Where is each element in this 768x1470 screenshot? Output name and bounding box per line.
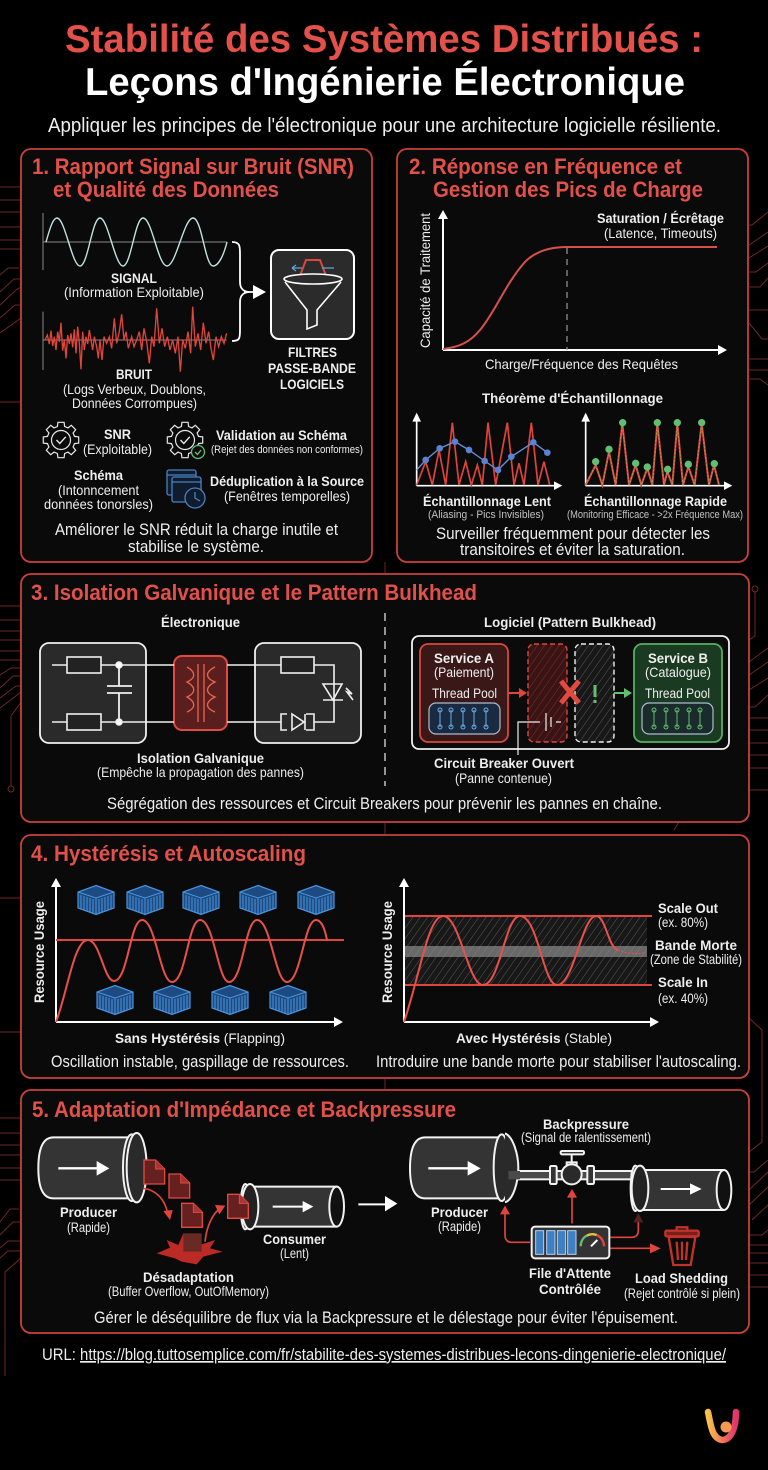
band labels: (ex. 80%): [658, 914, 708, 930]
icon: gear SNR: [43, 422, 79, 458]
sampling heading: Théorème d'Échantillonnage: [482, 390, 663, 406]
icon: gear validation: [167, 422, 204, 458]
mismatch labels: Désadaptation: [143, 1269, 234, 1285]
mismatch labels: (Rapide): [67, 1219, 110, 1235]
panel 2 footer: Surveiller fréquemment pour détecter les: [436, 525, 710, 543]
validation text: Validation au Schéma: [216, 427, 347, 443]
y axis label left: Resource Usage: [31, 901, 47, 1003]
panel: 5 impedance: [21, 1090, 749, 1333]
signal label: SIGNAL: [111, 270, 157, 286]
breaker label: Circuit Breaker Ouvert: [434, 755, 574, 771]
backpressure labels: Producer: [431, 1204, 489, 1220]
icon: bandpass filter funnel: [271, 250, 354, 339]
filter label: LOGICIELS: [280, 376, 344, 392]
schema text: Schéma: [74, 467, 123, 483]
backpressure labels: File d'Attente: [529, 1265, 611, 1281]
SNR text: [83, 426, 152, 457]
mismatch labels: (Buffer Overflow, OutOfMemory): [108, 1283, 269, 1299]
sampling labels: (Aliasing - Pics Invisibles): [428, 509, 544, 521]
sampling labels: Échantillonnage Rapide: [584, 493, 727, 509]
panel 2 footer: [436, 525, 710, 559]
filter label: [268, 344, 356, 392]
saturation label: (Latence, Timeouts): [604, 225, 717, 241]
icon: logo: [708, 1412, 736, 1440]
heading 2: 2. Réponse en Fréquence et: [409, 154, 683, 179]
schema text: données tonorsles): [44, 496, 153, 512]
panel: 2 frequency response: [397, 149, 748, 562]
breaker label: [434, 755, 574, 786]
panel 2 footer: transitoires et éviter la saturation.: [460, 541, 685, 559]
panel 1 footer: Améliorer le SNR réduit la charge inutile et: [55, 521, 338, 539]
header: [48, 18, 721, 137]
noise label: [63, 366, 206, 411]
sampling labels: [423, 493, 743, 521]
y axis label right: Resource Usage: [379, 901, 395, 1003]
signal wave: [43, 213, 227, 270]
subheads: [161, 614, 656, 630]
panel 5 footer: Gérer le déséquilibre de flux via la Backpressure et le délestage pour éviter l'épuisement.: [94, 1309, 678, 1327]
panel: 1 SNR: [21, 149, 372, 562]
noise wave: [43, 307, 227, 372]
chart: without hysteresis: [51, 878, 344, 1027]
band labels: Bande Morte: [655, 937, 737, 953]
backpressure labels: (Rapide): [438, 1218, 481, 1234]
y axis label: Capacité de Traitement: [417, 213, 433, 348]
band labels: (Zone de Stabilité): [650, 951, 742, 967]
title line 2: Leçons d'Ingénierie Électronique: [85, 60, 685, 104]
service B: Service B: [648, 650, 708, 666]
service A: (Paiement): [434, 664, 494, 680]
noise label: Données Corrompues): [72, 395, 197, 411]
service B: (Catalogue): [645, 664, 711, 680]
title line 1: Stabilité des Systèmes Distribués :: [65, 18, 703, 61]
backpressure diagram: [410, 1133, 731, 1265]
signal label: [64, 270, 204, 300]
caption left: Sans Hystérésis (Flapping): [115, 1030, 285, 1046]
band labels: [650, 900, 742, 1006]
filter label: PASSE-BANDE: [268, 360, 356, 376]
x axis label: Charge/Fréquence des Requêtes: [485, 356, 678, 372]
service A: Thread Pool: [432, 685, 497, 701]
noise label: BRUIT: [116, 366, 152, 382]
chart: fast sampling: [581, 413, 732, 490]
galvanic label: Isolation Galvanique: [137, 750, 264, 766]
service B: Thread Pool: [645, 685, 710, 701]
service A: Service A: [434, 650, 494, 666]
mismatch diagram: [38, 1133, 397, 1264]
panel 1 footer: stabilise le système.: [128, 538, 264, 556]
noise label: (Logs Verbeux, Doublons,: [63, 381, 206, 397]
backpressure labels: Backpressure: [543, 1116, 629, 1132]
SNR text: SNR: [104, 426, 131, 442]
dedup text: (Fenêtres temporelles): [224, 488, 350, 504]
heading 3: 3. Isolation Galvanique et le Pattern Bulkhead: [31, 580, 477, 605]
caption left: [51, 1030, 349, 1071]
backpressure labels: Load Shedding: [635, 1270, 728, 1286]
validation text: [211, 427, 363, 456]
backpressure labels: [431, 1116, 740, 1301]
schema text: (Intonncement: [58, 482, 139, 498]
chart: with hysteresis: [399, 878, 659, 1027]
open compartments: [508, 644, 632, 755]
service B: [634, 644, 722, 742]
panel: 3 isolation: [21, 574, 749, 822]
SNR text: (Exploitable): [83, 441, 152, 457]
panel 1 footer: [55, 521, 338, 556]
heading 1: 1. Rapport Signal sur Bruit (SNR): [32, 154, 354, 179]
heading 1: et Qualité des Données: [53, 177, 279, 202]
band labels: Scale In: [658, 974, 708, 990]
heading 2: Gestion des Pics de Charge: [433, 177, 703, 202]
backpressure labels: (Signal de ralentissement): [521, 1129, 651, 1145]
validation text: (Rejet des données non conformes): [211, 444, 363, 456]
panel 3 footer: Ségrégation des ressources et Circuit Breakers pour prévenir les pannes en chaîne.: [107, 795, 662, 813]
heading 4: 4. Hystérésis et Autoscaling: [31, 841, 306, 866]
panel: 4 hysteresis: [21, 835, 749, 1078]
backpressure labels: Contrôlée: [539, 1281, 601, 1297]
service A: [420, 644, 508, 742]
brace and arrow: [232, 242, 266, 341]
schema text: [44, 467, 153, 512]
galvanic label: [97, 750, 304, 780]
saturation label: [597, 210, 724, 241]
subheads: Électronique: [161, 614, 240, 630]
heading 5: 5. Adaptation d'Impédance et Backpressure: [32, 1097, 456, 1122]
mismatch labels: (Lent): [280, 1245, 309, 1261]
mismatch labels: [60, 1204, 327, 1299]
breaker label: (Panne contenue): [455, 770, 552, 786]
saturation chart: [438, 210, 727, 355]
icon: windows and clock: [167, 470, 205, 508]
dedup text: [210, 473, 364, 504]
signal label: (Information Exploitable): [64, 284, 204, 300]
backpressure labels: (Rejet contrôlé si plein): [624, 1285, 740, 1301]
caption left: Oscillation instable, gaspillage de ressources.: [51, 1053, 349, 1071]
sampling labels: Échantillonnage Lent: [423, 493, 551, 509]
subtitle: Appliquer les principes de l'électronique pour une architecture logicielle résiliente.: [48, 115, 721, 137]
mismatch labels: Producer: [60, 1204, 118, 1220]
caption right: [376, 1030, 741, 1071]
dedup text: Déduplication à la Source: [210, 473, 364, 489]
galvanic label: (Empêche la propagation des pannes): [97, 764, 304, 780]
band labels: Scale Out: [658, 900, 718, 916]
saturation label: Saturation / Écrêtage: [597, 210, 724, 226]
caption right: Avec Hystérésis (Stable): [456, 1030, 612, 1046]
filter label: FILTRES: [288, 344, 337, 360]
band labels: (ex. 40%): [658, 990, 708, 1006]
chart: slow sampling: [412, 413, 562, 490]
electronic circuit: [40, 643, 361, 743]
mismatch labels: Consumer: [263, 1231, 327, 1247]
subheads: Logiciel (Pattern Bulkhead): [484, 614, 656, 630]
bulkhead diagram: [412, 636, 729, 755]
